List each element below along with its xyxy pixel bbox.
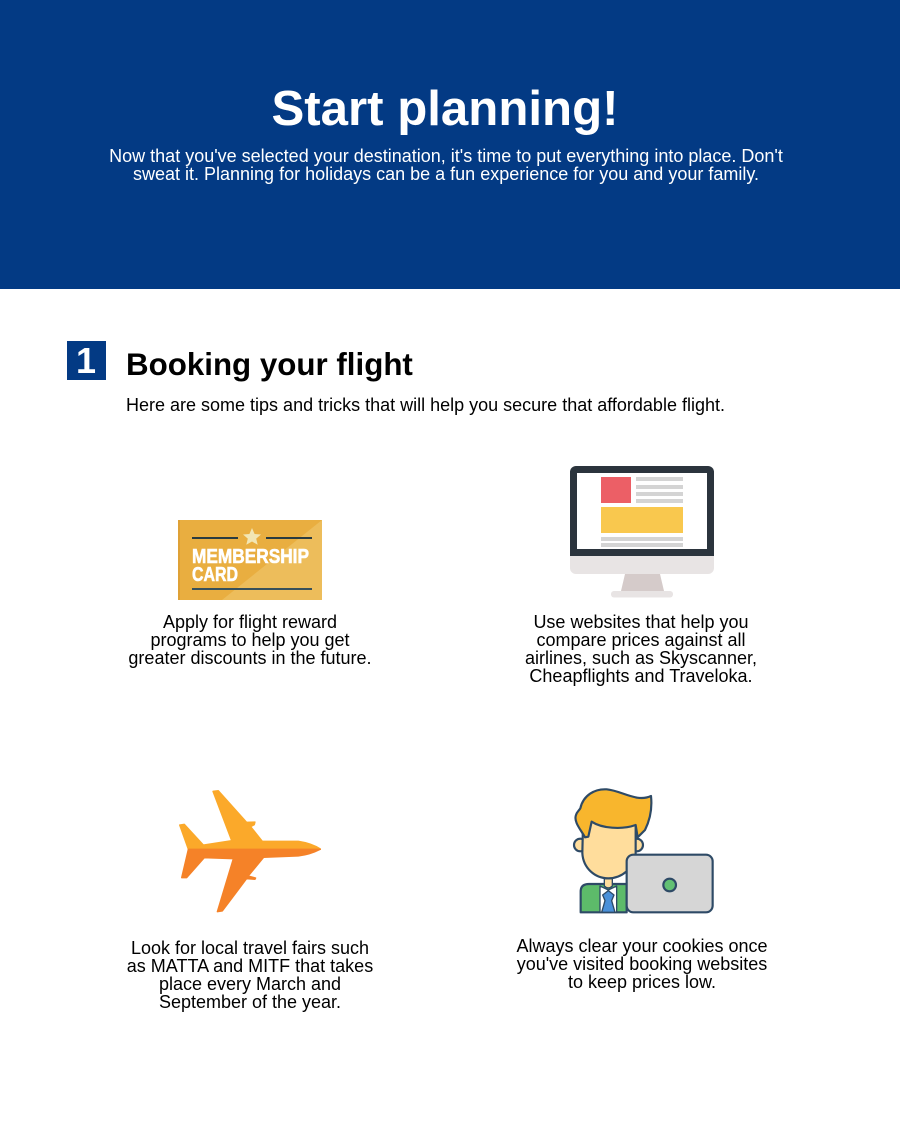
text: flight rewards tip: greater discounts in the future. — [128, 648, 372, 668]
text: travel fairs tip — [127, 938, 373, 1012]
text: comparison websites tip: airlines, such as Skyscanner, — [525, 648, 757, 668]
text: flight rewards tip: programs to help you get — [150, 630, 350, 650]
text: flight rewards tip — [128, 612, 372, 668]
intro text: sweat it. Planning for holidays can be a fun experience for you and your family. — [133, 164, 759, 184]
text: travel fairs tip: Look for local travel fairs such — [131, 938, 369, 958]
section subheading: Here are some tips and tricks that will help you secure that affordable flight. — [126, 395, 725, 415]
text: clear cookies tip — [516, 936, 768, 992]
icon: membership card: MEMBERSHIP — [192, 546, 309, 568]
intro text: Now that you've selected your destination, it's time to put everything into place. Don't — [109, 146, 783, 166]
text: travel fairs tip: September of the year. — [159, 992, 341, 1012]
section number badge — [67, 341, 106, 380]
text: comparison websites tip — [525, 612, 757, 686]
section number badge: 1 — [76, 340, 96, 381]
text: flight rewards tip: Apply for flight reward — [163, 612, 337, 632]
icon: membership card: CARD — [192, 564, 238, 586]
text: clear cookies tip: Always clear your cookies once — [516, 936, 768, 956]
text: comparison websites tip: Cheapflights and Traveloka. — [529, 666, 753, 686]
text: travel fairs tip: as MATTA and MITF that takes — [127, 956, 373, 976]
text: comparison websites tip: compare prices against all — [536, 630, 746, 650]
text: travel fairs tip: place every March and — [159, 974, 341, 994]
section heading: Booking your flight — [126, 347, 413, 382]
header banner — [0, 0, 900, 289]
text: clear cookies tip: you've visited booking websites — [517, 954, 767, 974]
text: comparison websites tip: Use websites that help you — [533, 612, 749, 632]
text: clear cookies tip: to keep prices low. — [568, 972, 716, 992]
title: Start planning! — [271, 81, 619, 136]
intro text — [109, 146, 783, 184]
